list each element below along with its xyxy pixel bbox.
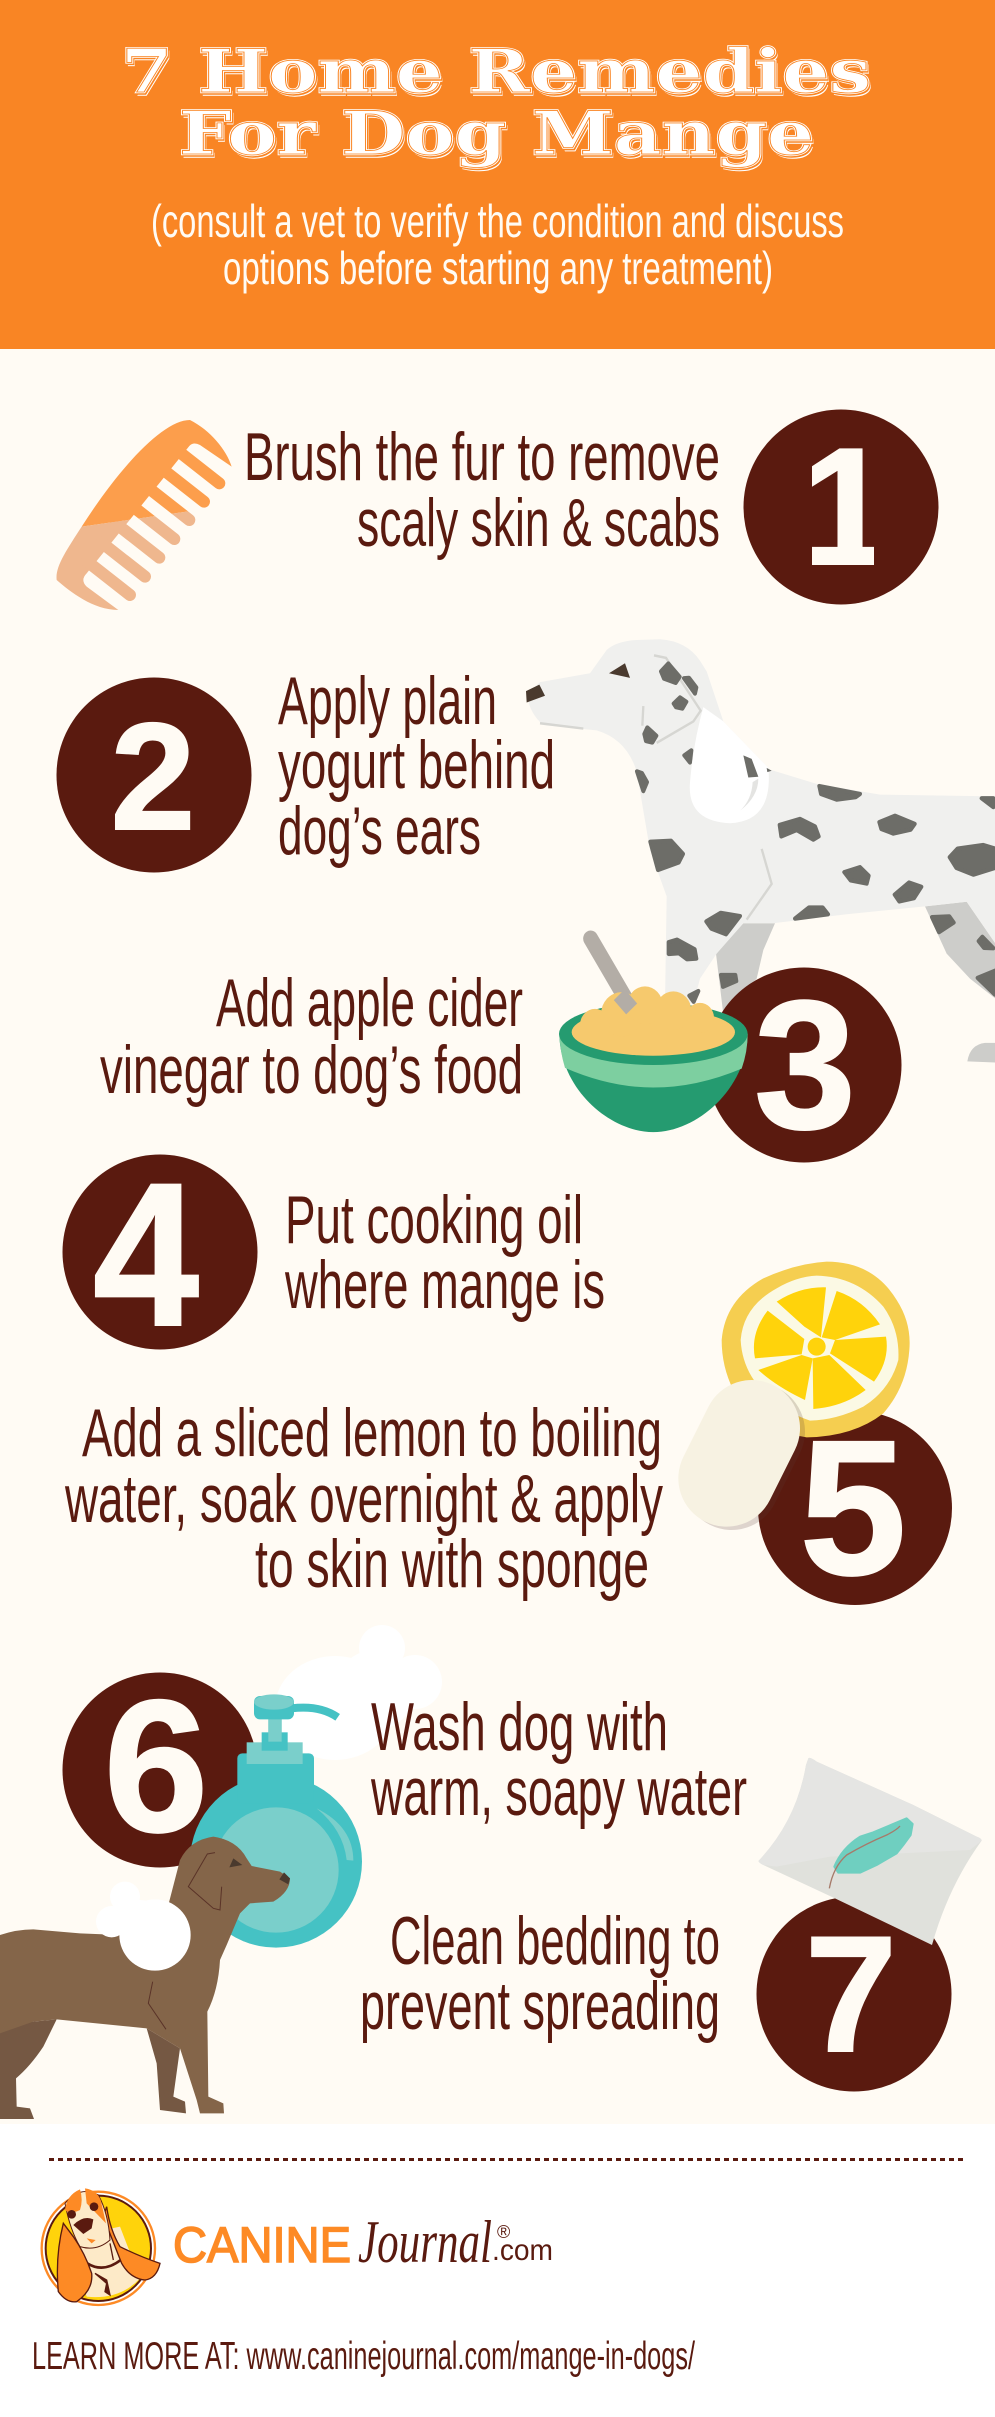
- number 3: [706, 962, 902, 1167]
- step 6 text: warm, soapy water: [370, 1754, 747, 1830]
- step 7 text: Clean bedding to: [390, 1903, 720, 1979]
- number 6: [62, 1661, 258, 1871]
- logo: canine journal: .com: [492, 2234, 553, 2267]
- title: 7 Home Remedies: [122, 38, 872, 108]
- step 4 text: Put cooking oil: [285, 1182, 583, 1258]
- number 5: 5: [800, 1400, 906, 1615]
- light band: [559, 1034, 748, 1087]
- illustration: brown dog: [0, 1837, 290, 2119]
- head: [65, 2191, 110, 2248]
- step 5 text: water, soak overnight & apply: [64, 1461, 663, 1537]
- step 7 text: prevent spreading: [360, 1968, 720, 2044]
- logo: canine journal: Journal: [358, 2209, 492, 2275]
- step 2 text: Apply plain: [278, 663, 497, 739]
- step 4 text: [284, 1182, 605, 1323]
- icon: bowl with spoon: [559, 939, 748, 1132]
- logo badge: [42, 2188, 160, 2305]
- dashed divider: [49, 2158, 964, 2161]
- step 5 text: to skin with sponge: [255, 1526, 649, 1602]
- title: 7 Home Remedies: [123, 40, 873, 110]
- step 5 text: [64, 1395, 663, 1602]
- eye and nose: [229, 1858, 290, 1884]
- number 4: 4: [93, 1141, 199, 1369]
- icon: comb: [57, 420, 232, 610]
- number 7: 7: [805, 1902, 897, 2086]
- step 7 text: [360, 1903, 720, 2044]
- bowl body: [559, 1034, 748, 1132]
- title: For Dog Mange: [180, 100, 815, 170]
- title: 7 Home Remedies: [121, 37, 871, 107]
- number 3: 3: [754, 962, 856, 1167]
- step 1 text: [244, 419, 720, 561]
- ears: [57, 2223, 92, 2302]
- wordmark: CANINE: [173, 2217, 351, 2273]
- icon: lemon and sponge: [722, 1262, 910, 1482]
- number 7: [756, 1896, 952, 2092]
- far front leg: [716, 923, 775, 1014]
- step 1 text: scaly skin & scabs: [357, 485, 720, 561]
- spots: [637, 664, 995, 1002]
- step 6 text: Wash dog with: [371, 1689, 668, 1765]
- illustration: soap bubbles: [275, 1625, 442, 1760]
- lemon: [722, 1262, 910, 1437]
- number 2: [56, 678, 252, 872]
- subtitle: [151, 195, 844, 294]
- number 4: [62, 1141, 258, 1369]
- sponge: [727, 1428, 752, 1478]
- logo: canine journal: [42, 2188, 553, 2305]
- subtitle: options before starting any treatment): [223, 242, 773, 294]
- step 5 text: Add a sliced lemon to boiling: [82, 1395, 662, 1471]
- title: 7 Home Remedies: [121, 37, 871, 107]
- step 6 text: [370, 1689, 747, 1830]
- icon: soap bottle: [190, 1694, 362, 1948]
- far legs: [0, 2019, 57, 2119]
- bubbles on dog: [96, 1882, 191, 1971]
- number 1: [744, 410, 938, 604]
- step 2 text: yogurt behind: [278, 727, 555, 803]
- logo: canine journal: ®: [497, 2222, 510, 2242]
- step 3 text: Add apple cider: [216, 965, 523, 1041]
- title: [121, 37, 873, 172]
- header banner: [0, 0, 995, 349]
- step 2 text: dog’s ears: [278, 793, 481, 869]
- feather: [834, 1818, 913, 1873]
- icon: pillow with feather: [759, 1758, 982, 1945]
- number 2: 2: [111, 692, 195, 862]
- yogurt drop: [690, 707, 769, 823]
- step 4 text: where mange is: [284, 1247, 605, 1323]
- step 3 text: [100, 965, 523, 1108]
- title: For Dog Mange: [181, 102, 816, 172]
- number 6: 6: [104, 1661, 208, 1871]
- sponge shadow: [732, 1432, 757, 1482]
- number 5: [758, 1400, 952, 1615]
- body: [0, 1837, 290, 2113]
- food: [572, 986, 735, 1056]
- step 2 text: [278, 663, 555, 869]
- step 1 text: Brush the fur to remove: [244, 419, 720, 495]
- number 1: 1: [799, 413, 893, 601]
- illustration: dalmatian: [526, 639, 995, 1062]
- ear and chest lines: [148, 1853, 222, 2029]
- rim: [559, 1003, 748, 1065]
- nose and eye: [526, 663, 630, 702]
- body: [527, 639, 995, 1004]
- step 3 text: vinegar to dog’s food: [100, 1032, 523, 1108]
- markings: [540, 655, 772, 920]
- title: For Dog Mange: [179, 99, 814, 169]
- title: For Dog Mange: [179, 99, 814, 169]
- hind leg: [925, 902, 995, 998]
